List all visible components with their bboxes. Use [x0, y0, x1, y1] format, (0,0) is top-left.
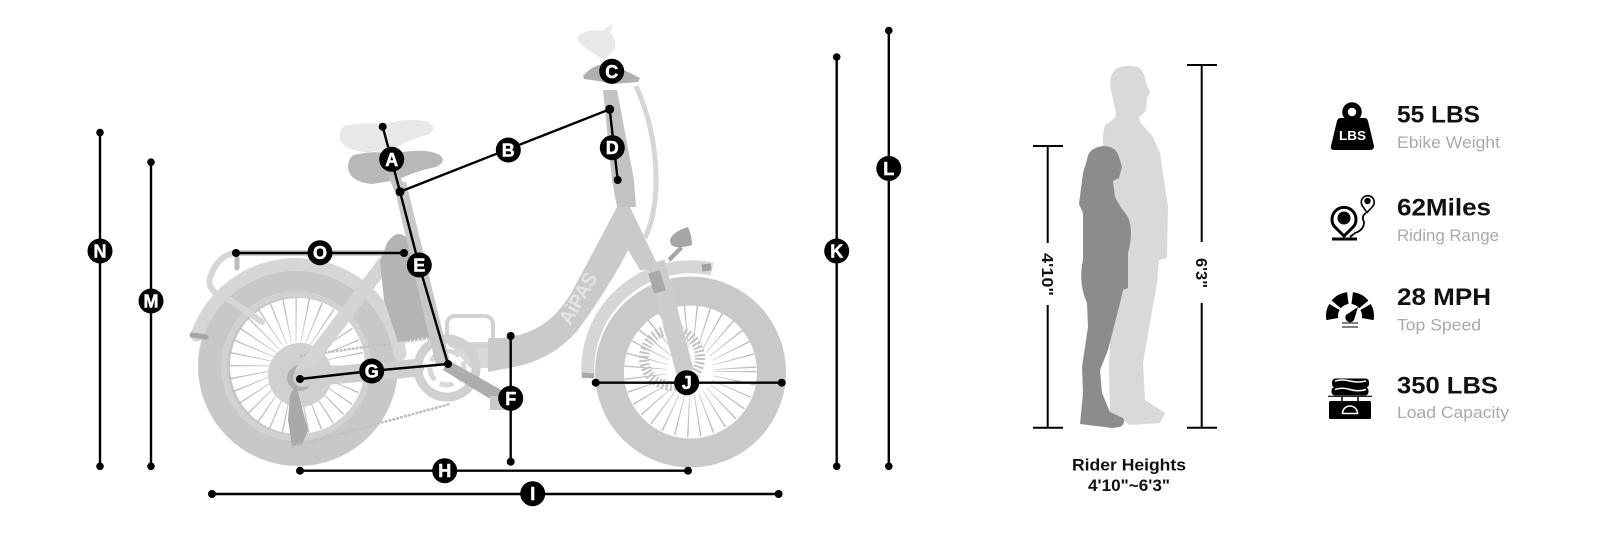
dimension badge A: A: [385, 150, 398, 170]
stat: load capacity: 350 LBS: [1397, 372, 1498, 400]
frame logo: AiPAS: [555, 269, 602, 328]
upper saddle position: [340, 120, 433, 152]
stat: load capacity: [1397, 372, 1510, 422]
brake cable: [636, 86, 656, 238]
handlebar upper position: [578, 23, 615, 60]
icon: speedometer: [1332, 298, 1368, 327]
stat: riding range: 62Miles: [1397, 194, 1491, 222]
seat post: [388, 175, 405, 190]
dimension lines: [100, 31, 889, 494]
dimension badge K: [824, 238, 849, 264]
height bracket 6'3": [1187, 65, 1217, 428]
dimension badge D: D: [606, 138, 619, 158]
front wheel: [610, 291, 772, 453]
stat: top speed: Top Speed: [1397, 316, 1481, 334]
silhouette: short rider: [1079, 146, 1131, 428]
dimension badge F: [498, 386, 523, 411]
height bracket 6'3": 6'3": [1192, 258, 1209, 288]
dimension badge B: B: [502, 140, 515, 160]
dimension badge G: [359, 358, 384, 384]
dimension badge J: [674, 370, 699, 395]
height bracket 4'10": 4'10": [1038, 253, 1055, 296]
dimension badge I: I: [530, 484, 535, 504]
rear wheel: [214, 282, 450, 450]
seat tube: [393, 182, 450, 366]
stem and hinge: [603, 90, 636, 207]
dimension badge H: H: [438, 461, 451, 481]
chainring and crank: [418, 316, 512, 410]
stat: riding range: Riding Range: [1397, 226, 1499, 245]
silhouette: tall rider: [1103, 66, 1168, 425]
front fender and fork: [582, 262, 712, 378]
main frame: [488, 207, 660, 372]
handlebar lower position: [583, 64, 640, 84]
icon: weight: LBS: [1339, 128, 1366, 143]
dimension badge L: L: [883, 159, 894, 179]
dimension badge C: [599, 59, 624, 84]
dimension badge F: F: [505, 389, 516, 409]
dimension badge B: [496, 138, 521, 162]
dimension badge E: [407, 252, 432, 278]
dimension badge N: N: [94, 242, 106, 262]
stat: ebike weight: Ebike Weight: [1397, 133, 1500, 152]
dimension badge C: C: [605, 62, 618, 82]
icon: load scale: [1328, 378, 1372, 419]
icon: weight: [1331, 105, 1374, 150]
icon: route pin: [1332, 196, 1374, 239]
stat: top speed: 28 MPH: [1397, 284, 1491, 311]
dimension badge O: O: [313, 243, 327, 263]
stat: ebike weight: [1397, 102, 1500, 152]
battery: [380, 234, 436, 342]
stat: ebike weight: 55 LBS: [1397, 102, 1480, 128]
height bracket 4'10": [1033, 146, 1063, 428]
dimension badge I: [520, 481, 545, 506]
stat: load capacity: Load Capacity: [1397, 403, 1510, 422]
dimension badge M: M: [144, 292, 158, 312]
dimension badge H: [432, 458, 457, 483]
lower saddle position: [348, 151, 443, 184]
rider heights caption: [1072, 456, 1186, 495]
dimension badge D: [600, 135, 625, 160]
stat: riding range: [1397, 194, 1499, 245]
dimension badge K: K: [830, 242, 843, 262]
dimension badge M: [138, 288, 164, 314]
dimension badge N: [88, 238, 112, 264]
dimension badge E: E: [413, 256, 425, 276]
dimension badge J: J: [682, 373, 692, 393]
dimension badge O: [308, 240, 332, 265]
rear fender and rack: [192, 253, 415, 378]
rider heights caption: 4'10"~6'3": [1088, 477, 1170, 495]
rider heights caption: Rider Heights: [1072, 456, 1186, 474]
dimension badge G: G: [365, 362, 379, 382]
stat: top speed: [1397, 284, 1491, 334]
dimension end dots: [96, 27, 893, 498]
headlight: [668, 227, 692, 262]
e-bike illustration: [192, 23, 772, 453]
dimension badge L: [876, 156, 901, 181]
dimension badge A: [379, 147, 404, 172]
